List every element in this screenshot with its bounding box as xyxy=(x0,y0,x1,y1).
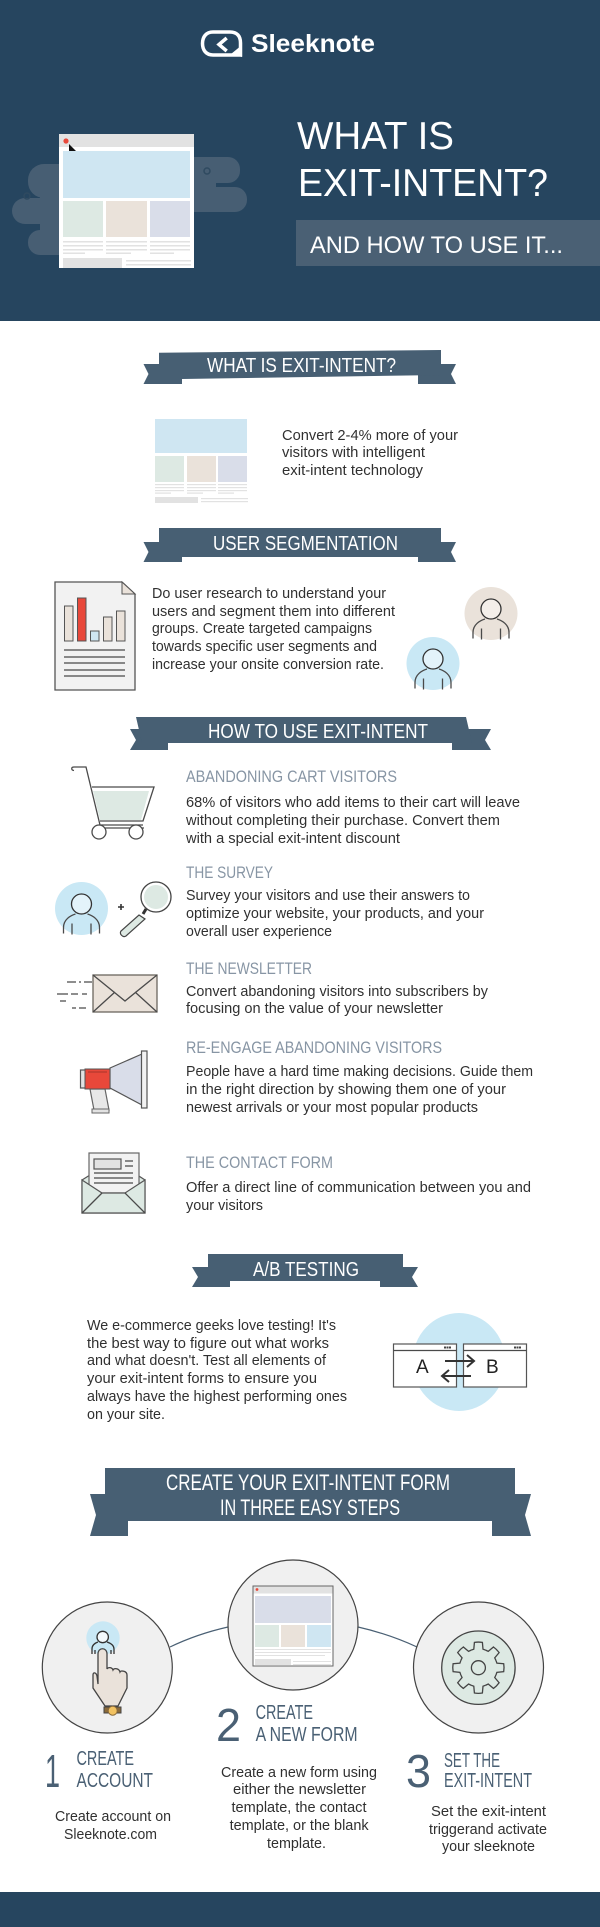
step 2 heading: 2 xyxy=(216,1699,241,1751)
item: the newsletter: Convert abandoning visitors into subscribers by xyxy=(186,983,488,1000)
ribbon heading: a/b testing xyxy=(192,1254,418,1287)
icon: report document with bar chart xyxy=(55,582,135,690)
item: the contact form: Offer a direct line of communication between you and xyxy=(186,1179,531,1196)
ribbon heading: create your exit-intent form: CREATE YOUR EXIT-INTENT FORM xyxy=(166,1470,450,1495)
step 2 heading: CREATE xyxy=(256,1702,313,1724)
ribbon heading: what is exit-intent: WHAT IS EXIT-INTENT? xyxy=(207,354,396,377)
text: convert 2-4% more: Convert 2-4% more of your xyxy=(282,427,458,444)
step 2 description: template, the contact xyxy=(232,1799,367,1816)
item: abandoning cart visitors: 68% of visitors who add items to their cart will leave xyxy=(186,794,520,811)
step 2 heading: A NEW FORM xyxy=(256,1724,358,1746)
text: a/b testing: We e-commerce geeks love testing! It's xyxy=(87,1317,336,1334)
step 3 heading: 3 xyxy=(406,1745,431,1797)
text: convert 2-4% more xyxy=(282,427,458,479)
icon: contact form envelope xyxy=(82,1153,145,1213)
icon: a/b test windows: A xyxy=(416,1357,429,1378)
ribbon heading: user segmentation: USER SEGMENTATION xyxy=(213,532,398,555)
title xyxy=(297,115,548,205)
connector lines between steps xyxy=(170,1627,417,1647)
text: user research: towards specific user segments and xyxy=(152,638,377,655)
text: a/b testing xyxy=(87,1317,347,1423)
text: a/b testing: always have the highest performing ones xyxy=(87,1388,347,1405)
text: a/b testing: and what doesn't. Test all elements of xyxy=(87,1352,327,1369)
step 3 heading: SET THE xyxy=(444,1750,500,1772)
step 2 illustration: new form window xyxy=(228,1560,358,1690)
item: the newsletter: focusing on the value of your newsletter xyxy=(186,1000,443,1017)
text: convert 2-4% more: visitors with intelligent xyxy=(282,444,426,461)
step 3 heading xyxy=(406,1745,532,1797)
text: user research: users and segment them into different xyxy=(152,603,396,620)
step 2 description: either the newsletter xyxy=(233,1781,366,1798)
ribbon heading: user segmentation xyxy=(144,528,456,562)
text: user research: groups. Create targeted campaigns xyxy=(152,620,372,637)
step 1 heading: 1 xyxy=(45,1745,60,1797)
step 2 description: Create a new form using xyxy=(221,1764,377,1781)
step 2 description: template. xyxy=(267,1835,326,1852)
step 3 illustration: gear xyxy=(414,1602,544,1733)
item: the newsletter: THE NEWSLETTER xyxy=(186,959,312,978)
footer bar xyxy=(0,1892,600,1927)
step 1 illustration: pointing hand xyxy=(42,1602,172,1733)
item: abandoning cart visitors xyxy=(185,767,520,847)
ribbon heading: what is exit-intent xyxy=(144,350,456,384)
text: a/b testing: your exit-intent forms to ensure you xyxy=(87,1370,317,1387)
step 2 heading xyxy=(216,1699,358,1751)
step 3 heading: EXIT-INTENT xyxy=(444,1770,532,1792)
step 3 description: Set the exit-intent xyxy=(431,1803,547,1820)
ribbon heading: how to use exit-intent: HOW TO USE EXIT-INTENT xyxy=(208,720,428,743)
step 2 description: template, or the blank xyxy=(230,1817,369,1834)
icon: flying envelope xyxy=(57,975,157,1012)
logo: Sleeknote: Sleeknote xyxy=(251,30,375,58)
item: re-engage abandoning visitors xyxy=(186,1038,533,1116)
item: abandoning cart visitors: ABANDONING CART VISITORS xyxy=(186,767,397,786)
ribbon heading: a/b testing: A/B TESTING xyxy=(253,1258,359,1281)
icon: user on beige circle xyxy=(464,587,518,640)
text: user research: increase your onsite conversion rate. xyxy=(152,656,384,673)
item: the survey: THE SURVEY xyxy=(186,863,273,882)
icon: a/b test windows: B xyxy=(486,1357,499,1378)
item: abandoning cart visitors: with a special exit-intent discount xyxy=(185,830,401,847)
panel: header xyxy=(0,0,600,321)
icon: a/b test windows xyxy=(394,1313,526,1411)
icon: form template preview xyxy=(155,419,248,503)
item: re-engage abandoning visitors: newest arrivals or your most popular products xyxy=(186,1099,478,1116)
subtitle bar xyxy=(296,220,600,266)
title: WHAT IS xyxy=(297,115,454,158)
step 3 description: your sleeknote xyxy=(442,1838,535,1855)
icon: user plus magnifier xyxy=(55,882,171,937)
item: the newsletter xyxy=(186,959,488,1017)
subtitle bar: AND HOW TO USE IT... xyxy=(310,232,563,259)
ribbon heading: how to use exit-intent xyxy=(130,717,491,750)
item: the survey: Survey your visitors and use their answers to xyxy=(186,887,470,904)
item: abandoning cart visitors: without completing their purchase. Convert them xyxy=(185,812,500,829)
step 1 description: Create account on xyxy=(55,1808,171,1825)
cloud shape xyxy=(12,157,247,255)
step 1 description: Sleeknote.com xyxy=(64,1826,157,1843)
text: a/b testing: the best way to figure out what works xyxy=(87,1335,329,1352)
ribbon heading: create your exit-intent form: IN THREE EASY STEPS xyxy=(220,1495,400,1520)
text: convert 2-4% more: exit-intent technology xyxy=(282,462,423,479)
text: a/b testing: on your site. xyxy=(87,1406,165,1423)
icon: megaphone xyxy=(80,1051,147,1113)
step 1 heading: CREATE xyxy=(76,1748,134,1770)
step 1 description xyxy=(55,1808,171,1843)
item: the contact form xyxy=(186,1153,531,1214)
logo: Sleeknote xyxy=(202,30,375,58)
step 2 description xyxy=(221,1764,377,1852)
item: the survey: optimize your website, your products, and your xyxy=(186,905,484,922)
step 1 heading xyxy=(45,1745,153,1797)
item: re-engage abandoning visitors: People have a hard time making decisions. Guide them xyxy=(186,1063,533,1080)
item: re-engage abandoning visitors: RE-ENGAGE ABANDONING VISITORS xyxy=(186,1038,442,1057)
browser window xyxy=(59,134,194,268)
item: re-engage abandoning visitors: in the right direction by showing them one of your xyxy=(186,1081,506,1098)
item: the contact form: THE CONTACT FORM xyxy=(186,1153,333,1172)
icon: shopping cart xyxy=(72,767,154,839)
item: the contact form: your visitors xyxy=(186,1197,263,1214)
step 3 description xyxy=(429,1803,547,1855)
title: EXIT-INTENT? xyxy=(298,162,548,205)
icon: user on blue circle xyxy=(406,637,460,690)
text: user research xyxy=(152,585,396,673)
illustration: browser window on cloud xyxy=(12,134,247,268)
step 3 description: triggerand activate xyxy=(429,1821,547,1838)
item: the survey: overall user experience xyxy=(186,923,332,940)
ribbon heading: create your exit-intent form xyxy=(90,1468,531,1536)
item: the survey xyxy=(186,863,484,940)
step 1 heading: ACCOUNT xyxy=(76,1770,153,1792)
text: user research: Do user research to understand your xyxy=(152,585,386,602)
